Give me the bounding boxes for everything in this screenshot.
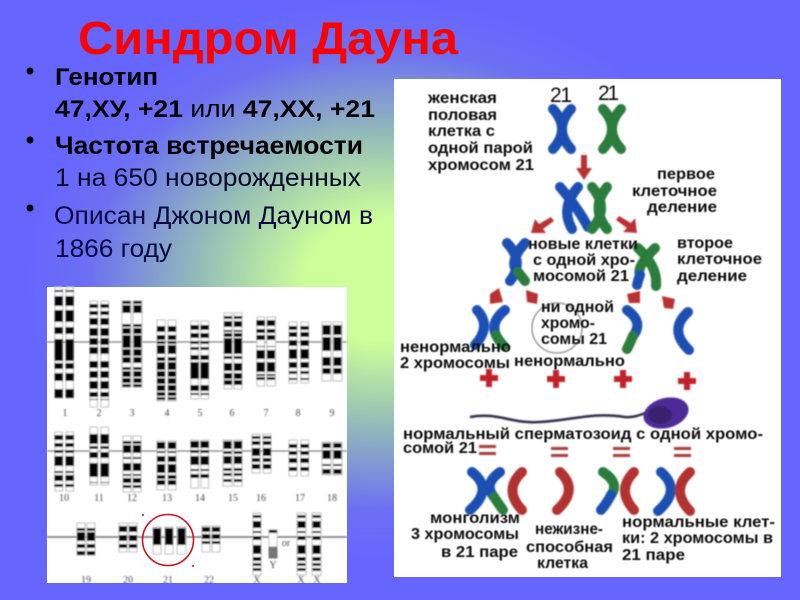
panel: meiosis diagram	[394, 79, 781, 577]
label: non-viable cell: клетка	[537, 555, 588, 572]
equals signs	[479, 445, 691, 457]
labels row 3	[81, 575, 321, 586]
label: new cells: с одной хро-	[533, 252, 635, 269]
sperm cell	[470, 393, 692, 433]
labels row 2: 17	[295, 493, 305, 504]
label: new cells	[528, 236, 638, 285]
label: no chromosome 21: сомы 21	[541, 331, 607, 348]
labels row 3: X	[297, 575, 305, 586]
label: abnormal 2 chromosomes	[400, 339, 511, 372]
labels row 2: 11	[94, 493, 104, 504]
label: abnormal: ненормально	[514, 353, 625, 370]
labels row 3: 19	[81, 575, 91, 586]
label: normal cells: ки: 2 хромосомы в	[622, 530, 773, 547]
labels row 2: 14	[195, 493, 205, 504]
label: mongolism: монголизм	[430, 510, 520, 527]
label: first division: первое	[657, 166, 715, 183]
row 1 chromosomes 1-9	[47, 287, 347, 407]
row 3 chromosomes 19-22 and sex chromosomes: or	[282, 538, 291, 549]
labels row 3: X	[313, 575, 321, 586]
label: first division	[632, 166, 717, 216]
labels row 1: 9	[330, 408, 334, 419]
label: normal cells	[622, 514, 775, 564]
label: no chromosome 21: хромо-	[541, 315, 595, 332]
labels row 2: 18	[327, 493, 337, 504]
labels row 1: 4	[164, 408, 170, 419]
labels row 1: 3	[130, 408, 134, 419]
labels row 2: 15	[228, 493, 238, 504]
label: female sex cell: половая	[428, 107, 497, 124]
label: female sex cell: хромосом 21	[428, 157, 534, 174]
label: second division: деление	[677, 268, 747, 285]
row 3 chromosomes 19-22 and sex chromosomes	[47, 513, 347, 575]
labels row 3: 21	[163, 575, 173, 586]
diagram labels	[400, 82, 775, 572]
small arrows	[490, 288, 675, 309]
arrow down	[576, 155, 592, 180]
label: 21 and 21	[550, 82, 619, 107]
label: non-viable cell: нежизне-	[535, 521, 603, 538]
label: abnormal 2 chromosomes: 2 хромосомы	[400, 355, 510, 372]
chromatids second row	[475, 310, 689, 350]
bullet: frequency: Частота встречаемости	[55, 132, 363, 160]
labels row 2: 12	[127, 493, 137, 504]
text block: facts	[26, 64, 375, 263]
label: no chromosome 21: ни одной	[541, 299, 614, 316]
label: first division: деление	[647, 199, 717, 216]
label: mongolism: 3 хромосомы	[411, 526, 519, 543]
chromosome pair 21	[553, 109, 621, 149]
label: second division: клеточное	[677, 251, 762, 268]
labels row 3: 22	[204, 575, 214, 586]
label: new cells: новые клетки	[528, 236, 638, 253]
bullet: genotype: 47,ХУ, +21 или 47,ХХ, +21	[55, 96, 375, 123]
label: second division: второе	[677, 235, 733, 252]
label: female sex cell: женская	[427, 90, 497, 107]
labels row 2: 10	[59, 493, 69, 504]
label: normal sperm: нормальный сперматозоид с одной хромо-	[403, 426, 763, 443]
label: non-viable cell: способная	[526, 539, 613, 556]
labels row 1: 2	[96, 408, 102, 419]
labels row 1: 6	[230, 408, 234, 419]
bullet: description: 1866 году	[55, 235, 173, 263]
labels row 2: 13	[162, 493, 172, 504]
bullet: genotype	[26, 64, 375, 123]
label: new cells: мосомой 21	[533, 268, 629, 285]
chromosomes second division	[507, 243, 656, 286]
labels row 1: 1	[62, 408, 68, 419]
arrows diagonal	[531, 216, 637, 233]
label: female sex cell	[427, 90, 534, 174]
labels row 2	[59, 493, 337, 504]
labels row 1: 7	[264, 408, 268, 419]
labels row 1: 5	[198, 408, 202, 419]
label: non-viable cell	[526, 521, 613, 572]
label: female sex cell: клетка с	[428, 123, 495, 140]
plus signs	[480, 369, 696, 390]
labels row 1	[62, 408, 334, 419]
label: normal sperm	[403, 426, 763, 457]
labels row 3: X	[253, 575, 261, 586]
crossing chromosomes	[560, 187, 607, 229]
bullet: frequency: 1 на 650 новорожденных	[55, 164, 362, 192]
panel: karyotype	[47, 287, 347, 586]
label: second division	[677, 235, 762, 285]
highlight circle: trisomy 21	[142, 514, 194, 567]
label: 21 and 21: 21	[598, 82, 619, 105]
bullet: genotype: Генотип	[55, 64, 158, 91]
chromosomes and arrows	[470, 109, 696, 511]
bullet: frequency	[26, 132, 363, 192]
label: first division: клеточное	[632, 183, 717, 200]
row 3 chromosomes 19-22 and sex chromosomes: Y	[269, 560, 277, 571]
label: female sex cell: одной парой	[428, 140, 533, 157]
label: no chromosome 21	[541, 299, 614, 348]
label: normal sperm: сомой 21	[403, 440, 477, 457]
empty cell circle	[532, 303, 582, 353]
label: normal cells: нормальные клет-	[622, 514, 775, 531]
label: mongolism	[411, 510, 520, 561]
label: 21 and 21: 21	[550, 84, 572, 107]
labels row 1: 8	[296, 408, 300, 419]
label: mongolism: в 21 паре	[441, 544, 518, 561]
chromatids final row	[470, 472, 690, 511]
labels row 2: 16	[256, 493, 266, 504]
label: abnormal 2 chromosomes: ненормально	[400, 339, 511, 356]
row 2 chromosomes 10-18	[47, 427, 347, 492]
labels row 3: 20	[123, 575, 133, 586]
label: normal cells: 21 паре	[622, 547, 685, 564]
title: Синдром Дауна	[78, 12, 458, 64]
bullet: description	[26, 202, 373, 263]
bullet: description: Описан Джоном Дауном в	[54, 202, 373, 230]
